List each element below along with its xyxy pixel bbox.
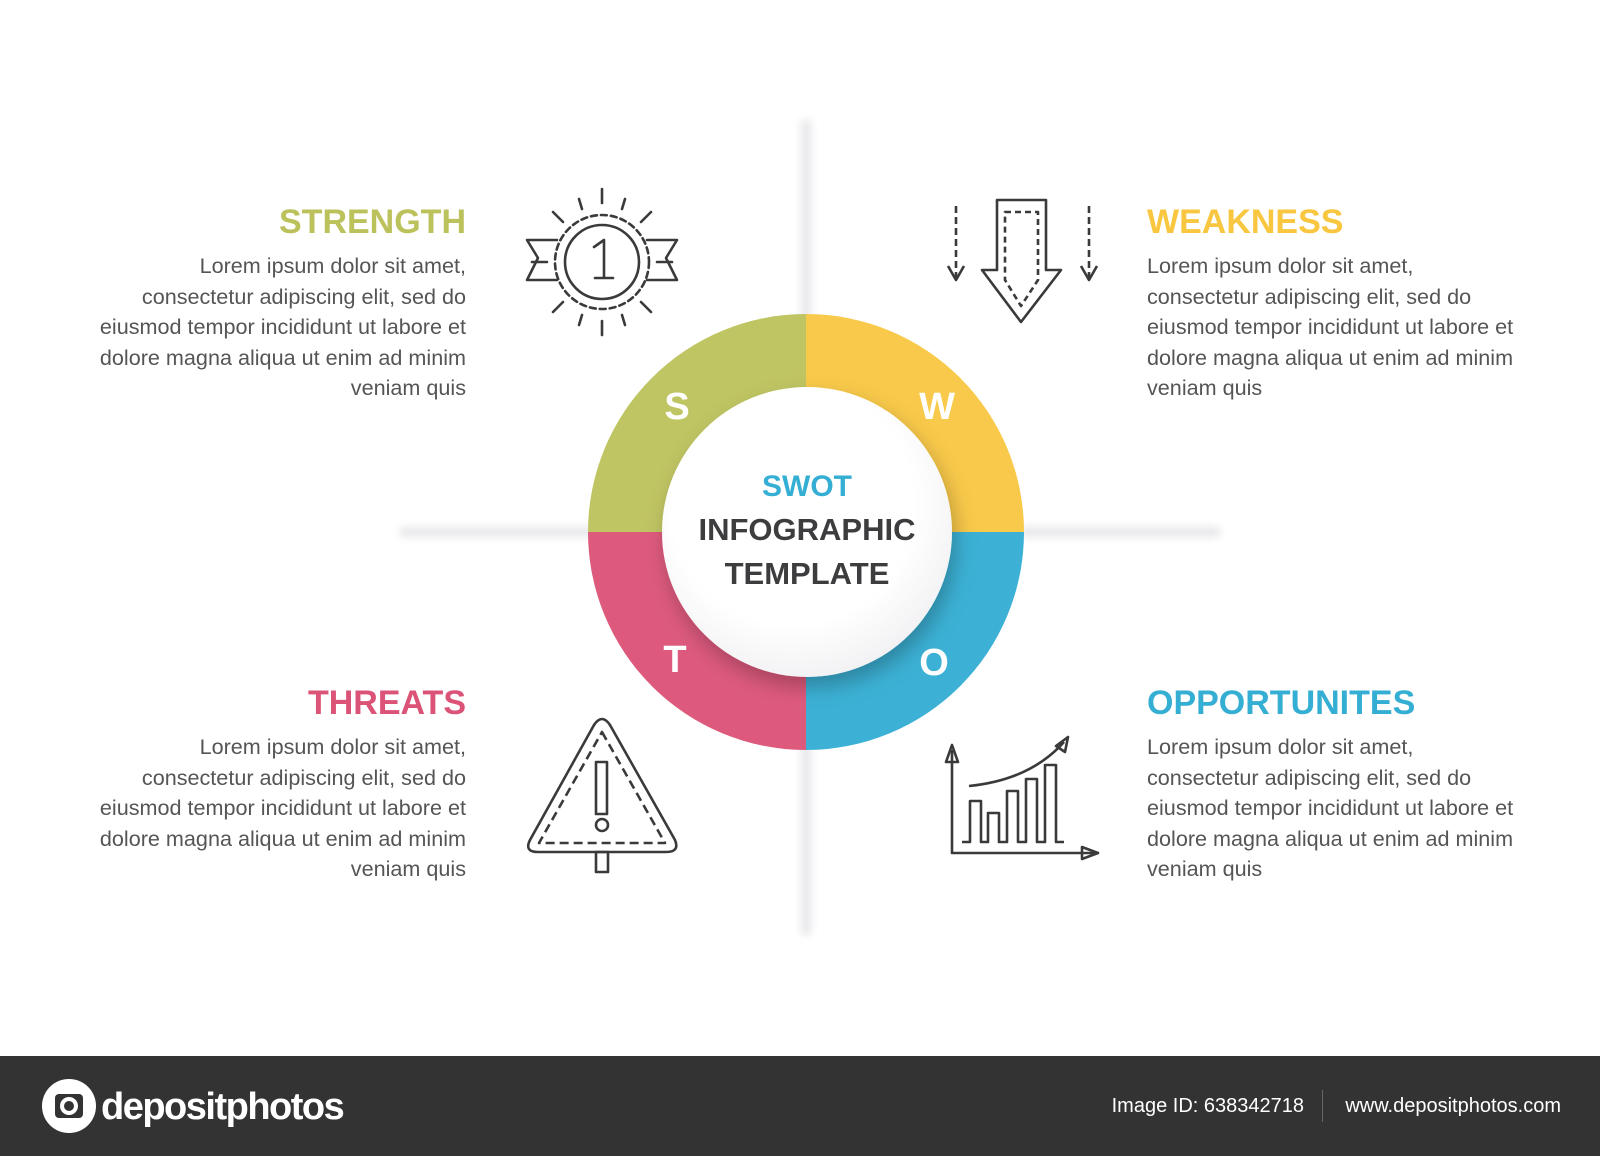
letters: T <box>663 639 687 681</box>
center circle: TEMPLATE <box>725 556 889 591</box>
heading: threats: THREATS <box>308 684 466 722</box>
text: threats <box>100 734 466 881</box>
letters: S <box>664 386 690 428</box>
text: threats: dolore magna aliqua ut enim ad minim <box>100 826 466 851</box>
text: strength: Lorem ipsum dolor sit amet, <box>200 253 466 278</box>
text: strength: veniam quis <box>351 375 466 400</box>
center circle: INFOGRAPHIC <box>698 512 916 547</box>
heading: weakness: WEAKNESS <box>1147 203 1343 241</box>
icon: medal <box>527 189 677 335</box>
letters: W <box>919 386 955 428</box>
text: strength: eiusmod tempor incididunt ut labore et <box>100 314 466 339</box>
fold shadows <box>400 120 1220 935</box>
text: threats: Lorem ipsum dolor sit amet, <box>200 734 466 759</box>
text: opportunities: Lorem ipsum dolor sit amet, <box>1147 734 1413 759</box>
text: strength: dolore magna aliqua ut enim ad minim <box>100 345 466 370</box>
footer bar <box>0 1056 1600 1156</box>
center circle <box>662 387 952 677</box>
footer bar: www.depositphotos.com <box>1344 1095 1561 1117</box>
text: weakness: Lorem ipsum dolor sit amet, <box>1147 253 1413 278</box>
text: threats: eiusmod tempor incididunt ut labore et <box>100 795 466 820</box>
logo: depositphotos <box>101 1086 344 1128</box>
icon: down arrows <box>948 200 1097 322</box>
letters <box>663 386 955 684</box>
center circle: SWOT <box>762 470 852 503</box>
text: opportunities: dolore magna aliqua ut enim ad minim <box>1147 826 1513 851</box>
logo <box>42 1079 344 1133</box>
heading: strength: STRENGTH <box>279 203 466 241</box>
text: threats: veniam quis <box>351 856 466 881</box>
text: weakness: consectetur adipiscing elit, sed do <box>1147 284 1471 309</box>
icon: growth chart <box>946 737 1098 859</box>
text: opportunities: consectetur adipiscing elit, sed do <box>1147 765 1471 790</box>
text: opportunities: veniam quis <box>1147 856 1262 881</box>
text: weakness: eiusmod tempor incididunt ut labore et <box>1147 314 1513 339</box>
text: weakness <box>1147 253 1513 400</box>
text: strength <box>100 253 466 400</box>
text: opportunities: eiusmod tempor incididunt ut labore et <box>1147 795 1513 820</box>
text: opportunities <box>1147 734 1513 881</box>
text: weakness: dolore magna aliqua ut enim ad minim <box>1147 345 1513 370</box>
text: weakness: veniam quis <box>1147 375 1262 400</box>
icon: warning sign <box>528 719 676 872</box>
letters: O <box>919 642 949 684</box>
SWOT ring <box>588 314 1024 750</box>
footer text: Image ID: 638342718 <box>1112 1095 1304 1117</box>
text: threats: consectetur adipiscing elit, sed do <box>142 765 466 790</box>
heading: opportunities: OPPORTUNITES <box>1147 684 1415 722</box>
text: strength: consectetur adipiscing elit, sed do <box>142 284 466 309</box>
